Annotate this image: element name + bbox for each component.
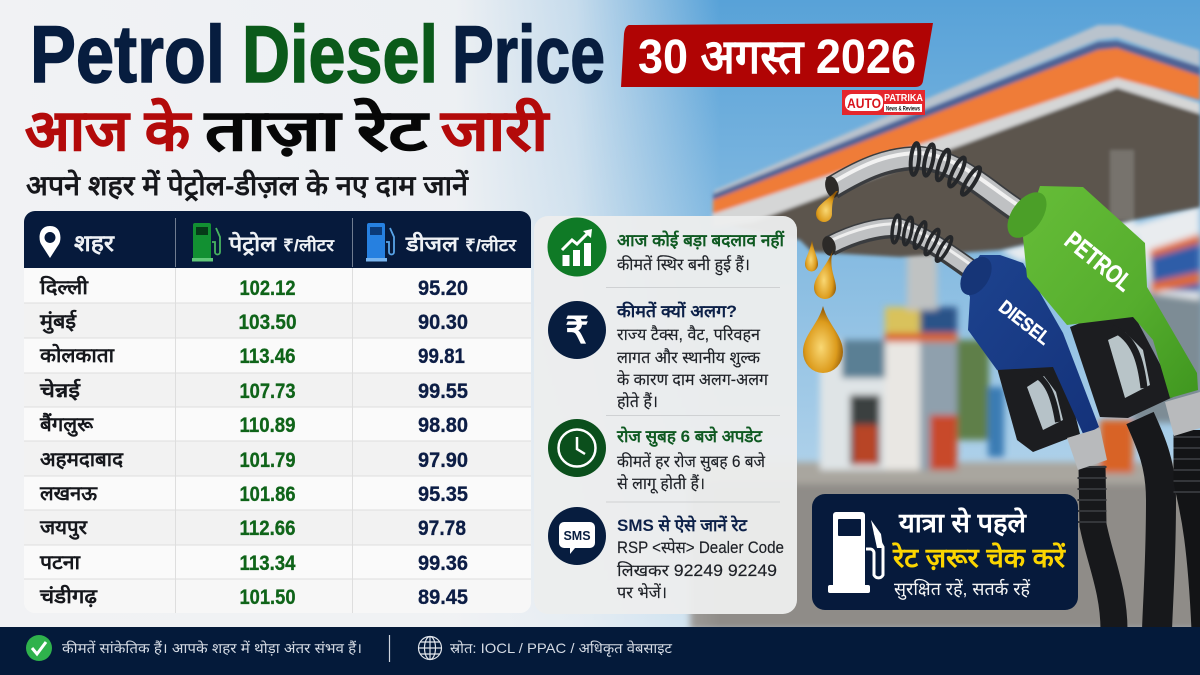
icon: check xyxy=(26,635,52,661)
diesel prices: 90.30 xyxy=(418,311,468,334)
panel: information xyxy=(534,216,797,614)
text: why prices differ: कीमतें क्यों अलग? xyxy=(616,301,737,321)
diesel prices: 99.55 xyxy=(418,380,468,403)
petrol nozzle xyxy=(1000,185,1200,436)
petrol prices: 110.89 xyxy=(240,414,296,437)
petrol prices: 112.66 xyxy=(240,517,296,540)
header: diesel per litre: डीजल xyxy=(405,231,459,256)
text: sms how-to: लिखकर 92249 92249 xyxy=(617,561,777,580)
petrol prices: 113.34 xyxy=(240,552,296,575)
text: daily update: रोज सुबह 6 बजे अपडेट xyxy=(616,426,763,447)
icon: blue pump xyxy=(366,223,394,262)
icon: rising chart xyxy=(548,218,606,276)
logo: Auto Patrika: PATRIKA xyxy=(884,93,923,104)
petrol prices: 101.86 xyxy=(240,483,296,506)
heading: aaj ke taaza rate jari: रेट xyxy=(354,98,430,163)
text: no big change: आज कोई बड़ा बदलाव नहीं xyxy=(617,230,785,250)
callout: check rate before travel: सुरक्षित रहें, सतर्क रहें xyxy=(894,578,1030,600)
petrol prices: 113.46 xyxy=(240,345,296,368)
icon: rupee xyxy=(548,301,606,359)
text: daily update xyxy=(616,426,766,494)
diesel prices xyxy=(418,277,468,609)
price table xyxy=(24,211,531,613)
footer bar xyxy=(0,627,1200,675)
icon: clock xyxy=(548,419,606,477)
text: why prices differ: राज्य टैक्स, वैट, परिवहन xyxy=(617,325,761,344)
heading: aaj ke taaza rate jari xyxy=(25,98,551,163)
header: city: शहर xyxy=(74,230,116,256)
diesel nozzle xyxy=(954,251,1107,470)
callout: check rate before travel: रेट ज़रूर चेक करें xyxy=(892,542,1066,573)
city names: कोलकाता xyxy=(39,343,115,367)
hoses xyxy=(1092,418,1200,630)
callout: check rate before travel: यात्रा से पहले xyxy=(898,507,1028,538)
text: sms how-to: RSP <स्पेस> Dealer Code xyxy=(617,538,784,557)
diesel prices: 97.90 xyxy=(418,449,468,472)
icon: sms xyxy=(548,507,606,565)
text: daily update: कीमतें हर रोज सुबह 6 बजे xyxy=(617,452,766,472)
city names: बैंगलुरू xyxy=(39,412,94,437)
text: sms how-to xyxy=(617,515,784,602)
petrol prices xyxy=(238,277,296,609)
city names: अहमदाबाद xyxy=(40,449,124,471)
icon: white fuel pump xyxy=(828,512,883,593)
text: why prices differ: लागत और स्थानीय शुल्क xyxy=(617,348,760,368)
diesel nozzle: DIESEL xyxy=(994,297,1054,350)
icon: sms: SMS xyxy=(563,529,591,543)
title: Petrol Diesel Price: Petrol xyxy=(30,10,225,100)
city names: मुंबई xyxy=(39,309,77,334)
icon: location pin xyxy=(40,226,60,258)
image: fuel nozzles with drops xyxy=(803,143,1200,630)
heading: aaj ke taaza rate jari: आज के xyxy=(25,98,192,163)
footer note: कीमतें सांकेतिक हैं। आपके शहर में थोड़ा अंतर संभव हैं। xyxy=(62,640,362,656)
heading: aaj ke taaza rate jari: ताज़ा xyxy=(204,99,343,163)
city names xyxy=(39,275,124,608)
petrol prices: 101.50 xyxy=(240,586,296,609)
diesel prices: 95.20 xyxy=(418,277,468,300)
icon: rupee: ₹ xyxy=(565,310,589,351)
icon: globe xyxy=(418,636,442,660)
icon: green pump xyxy=(192,223,220,262)
text: sms how-to: पर भेजें। xyxy=(617,583,667,602)
petrol prices: 102.12 xyxy=(240,277,296,300)
heading: aaj ke taaza rate jari: जारी xyxy=(440,98,551,163)
city names: जयपुर xyxy=(39,517,88,540)
petrol prices: 101.79 xyxy=(240,449,296,472)
title: Petrol Diesel Price xyxy=(30,10,605,100)
city names: चंडीगढ़ xyxy=(39,584,98,608)
fuel drops xyxy=(803,191,843,373)
footer source: स्रोत: IOCL / PPAC / अधिकृत वेबसाइट xyxy=(450,640,673,657)
diesel prices: 97.78 xyxy=(418,517,466,540)
text: no big change: कीमतें स्थिर बनी हुई हैं। xyxy=(617,255,750,276)
text: sms how-to: SMS से ऐसे जानें रेट xyxy=(617,515,748,535)
subheading: अपने शहर में पेट्रोल-डीज़ल के नए दाम जानें xyxy=(26,169,469,202)
header: petrol per litre xyxy=(228,231,335,256)
petrol spout xyxy=(823,143,1022,214)
logo: Auto Patrika: News & Reviews xyxy=(886,106,920,112)
header: diesel per litre: ₹/लीटर xyxy=(465,235,517,255)
diesel prices: 89.45 xyxy=(418,586,468,609)
petrol nozzle: PETROL xyxy=(1059,226,1137,297)
title: Petrol Diesel Price: Diesel xyxy=(242,10,438,100)
header: diesel per litre xyxy=(405,231,517,256)
text: daily update: से लागू होती हैं। xyxy=(617,474,705,494)
petrol prices: 103.50 xyxy=(238,311,296,334)
text: why prices differ: के कारण दाम अलग-अलग xyxy=(617,370,769,389)
date badge: 30 अगस्त 2026 xyxy=(638,31,916,84)
city names: दिल्ली xyxy=(39,275,89,299)
city names: पटना xyxy=(39,552,81,574)
title: Petrol Diesel Price: Price xyxy=(452,10,605,100)
header: petrol per litre: पेट्रोल xyxy=(228,231,277,256)
diesel prices: 99.36 xyxy=(418,552,468,575)
petrol prices: 107.73 xyxy=(240,380,296,403)
text: why prices differ: होते हैं। xyxy=(617,392,658,411)
logo: Auto Patrika xyxy=(842,90,925,115)
text: why prices differ xyxy=(616,301,769,411)
diesel prices: 99.81 xyxy=(418,345,465,368)
text: no big change xyxy=(617,230,785,276)
logo: Auto Patrika: AUTO xyxy=(847,95,881,111)
callout: check rate before travel xyxy=(812,494,1078,610)
diesel spout xyxy=(820,215,974,272)
diesel prices: 98.80 xyxy=(418,414,468,437)
table header band xyxy=(24,211,531,268)
header: petrol per litre: ₹/लीटर xyxy=(283,235,335,255)
diesel prices: 95.35 xyxy=(418,483,468,506)
city names: लखनऊ xyxy=(39,483,98,505)
city names: चेन्नई xyxy=(39,378,81,402)
